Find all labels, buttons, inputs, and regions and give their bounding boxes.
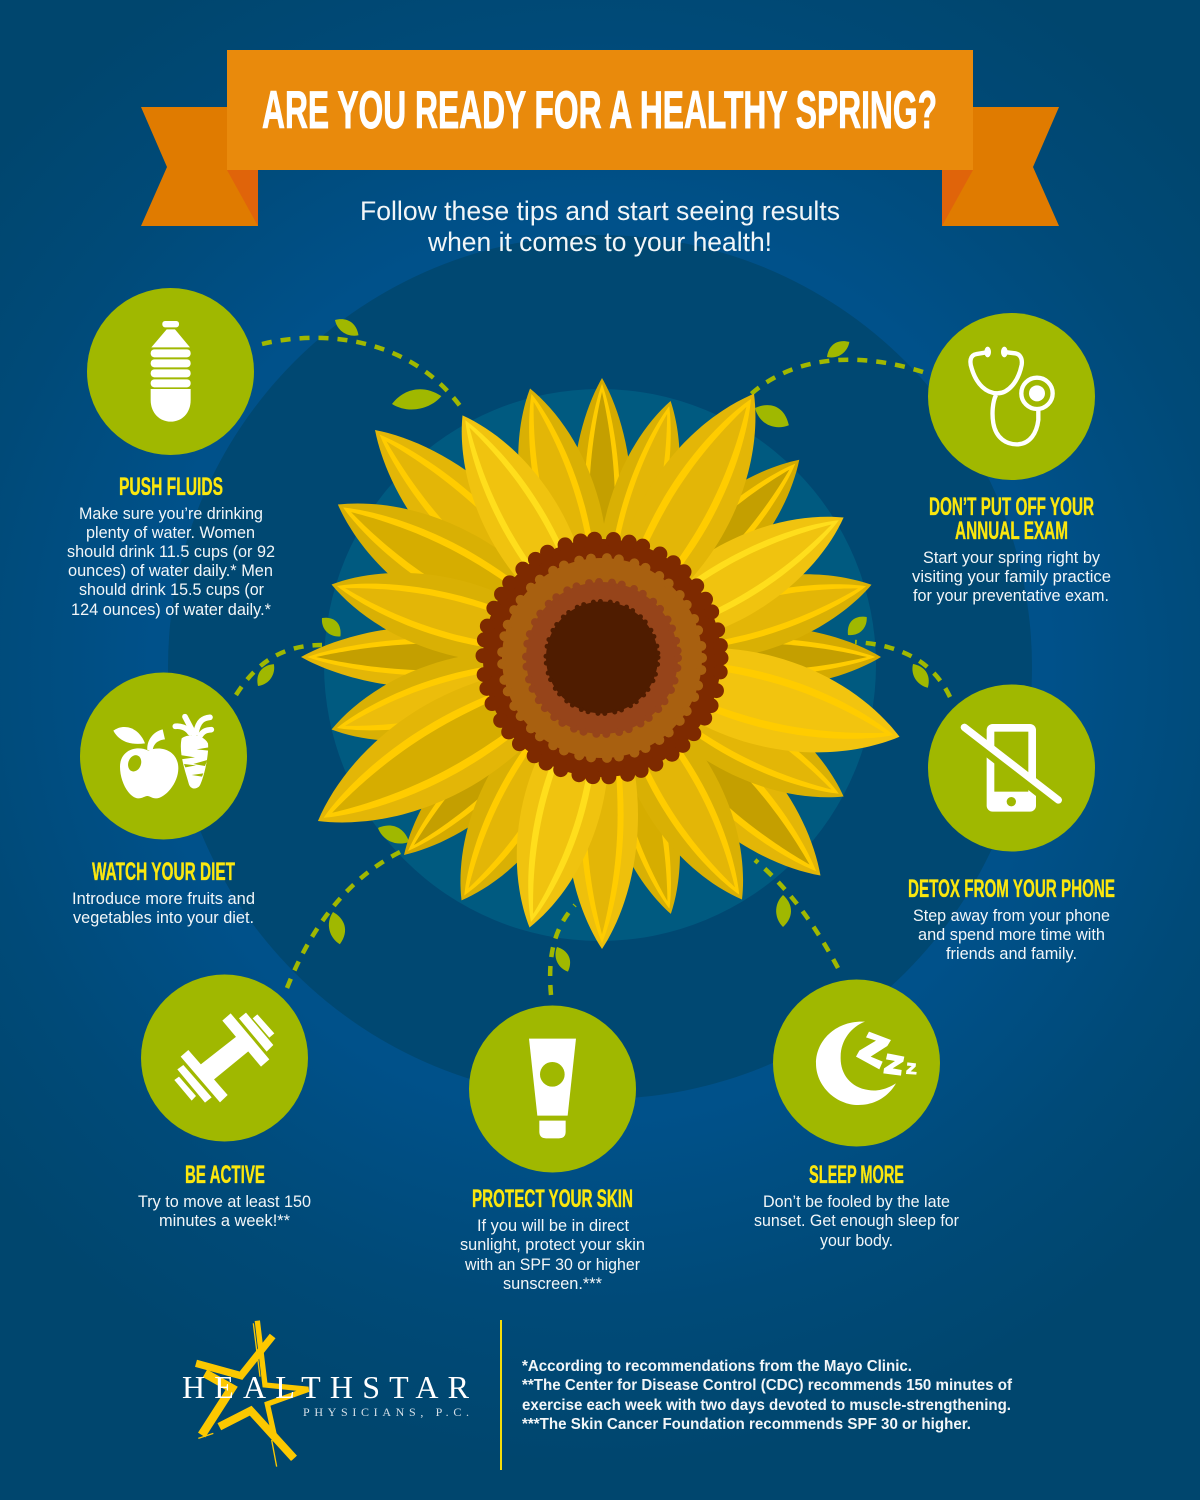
text block: should drink 11.5 cups (or 92	[67, 543, 275, 561]
wordmark: HEALTHSTAR	[182, 1369, 470, 1405]
text block: for your preventative exam.	[913, 587, 1109, 605]
subtitle	[360, 196, 840, 257]
panel: sleep more	[754, 980, 959, 1250]
text block: 124 ounces) of water daily.*	[71, 601, 272, 619]
text block: minutes a week!**	[159, 1212, 291, 1230]
text block: sunscreen.***	[503, 1275, 603, 1293]
dashed vines and leaves	[236, 314, 950, 995]
text block: with an SPF 30 or higher	[464, 1256, 640, 1274]
subtitle: Follow these tips and start seeing results	[360, 196, 840, 226]
tagline: PHYSICIANS, P.C.	[303, 1405, 469, 1419]
heading: SLEEP MORE	[809, 1161, 904, 1189]
heading	[929, 493, 1094, 545]
footnotes: **The Center for Disease Control (CDC) recommends 150 minutes of	[522, 1377, 1013, 1394]
text block: Step away from your phone	[913, 907, 1110, 925]
heading: ANNUAL EXAM	[955, 517, 1068, 545]
icon: dumbbell	[141, 974, 308, 1142]
inner teal circle	[324, 389, 876, 941]
heading: DON’T PUT OFF YOUR	[929, 493, 1094, 521]
text block	[754, 1193, 959, 1250]
icon: sunscreen tube	[469, 1006, 636, 1172]
subtitle: when it comes to your health!	[427, 227, 772, 257]
text block: plenty of water. Women	[86, 524, 255, 542]
heading: PROTECT YOUR SKIN	[472, 1185, 633, 1213]
panel: annual exam	[912, 313, 1111, 605]
text block	[912, 549, 1111, 605]
heading: BE ACTIVE	[185, 1161, 265, 1189]
panel: push fluids	[67, 288, 275, 619]
icon: stethoscope	[928, 313, 1095, 480]
text block: friends and family.	[946, 945, 1077, 963]
text block	[138, 1193, 311, 1230]
footnotes: exercise each week with two days devoted to muscle-strengthening.	[522, 1397, 1011, 1414]
icon: apple and carrot	[80, 672, 247, 840]
text block: ounces) of water daily.* Men	[68, 562, 273, 580]
icon: star	[196, 1321, 308, 1467]
panel: watch your diet	[72, 672, 255, 927]
text block: visiting your family practice	[912, 568, 1111, 586]
flower center	[483, 539, 721, 777]
footnotes: ***The Skin Cancer Foundation recommends SPF 30 or higher.	[522, 1416, 971, 1433]
footnotes: *According to recommendations from the Mayo Clinic.	[522, 1358, 912, 1375]
banner ribbon	[141, 50, 1059, 226]
text block: Make sure you’re drinking	[79, 505, 263, 523]
text block: Introduce more fruits and	[72, 890, 255, 908]
heading: PUSH FLUIDS	[119, 473, 223, 501]
icon: crossed-out phone	[928, 684, 1095, 852]
back petals	[301, 378, 881, 904]
text block: your body.	[820, 1232, 893, 1250]
text block: Start your spring right by	[923, 549, 1101, 567]
large dark circle	[168, 235, 1032, 1099]
footnotes	[522, 1358, 1013, 1433]
text block: vegetables into your diet.	[73, 909, 254, 927]
text block: If you will be in direct	[477, 1217, 629, 1235]
sunflower	[295, 372, 911, 949]
icon: moon and Z letters	[773, 980, 940, 1146]
panel: protect your skin	[460, 1006, 645, 1293]
panel: detox from your phone	[908, 684, 1115, 963]
panel: be active	[138, 974, 311, 1230]
text block	[913, 907, 1110, 963]
text block: sunset. Get enough sleep for	[754, 1212, 959, 1230]
text block: and spend more time with	[918, 926, 1105, 944]
text block: Try to move at least 150	[138, 1193, 311, 1211]
text block: Don’t be fooled by the late	[763, 1193, 950, 1211]
middle petals	[317, 379, 881, 949]
logo: HealthStar Physicians	[182, 1321, 470, 1467]
text block: sunlight, protect your skin	[460, 1236, 645, 1254]
text block	[67, 505, 275, 619]
divider	[500, 1320, 502, 1470]
text block	[72, 890, 255, 927]
text block: should drink 15.5 cups (or	[79, 581, 264, 599]
icon: water bottle	[87, 288, 254, 455]
front petals	[295, 372, 911, 938]
heading: WATCH YOUR DIET	[92, 858, 235, 886]
text block	[460, 1217, 645, 1293]
